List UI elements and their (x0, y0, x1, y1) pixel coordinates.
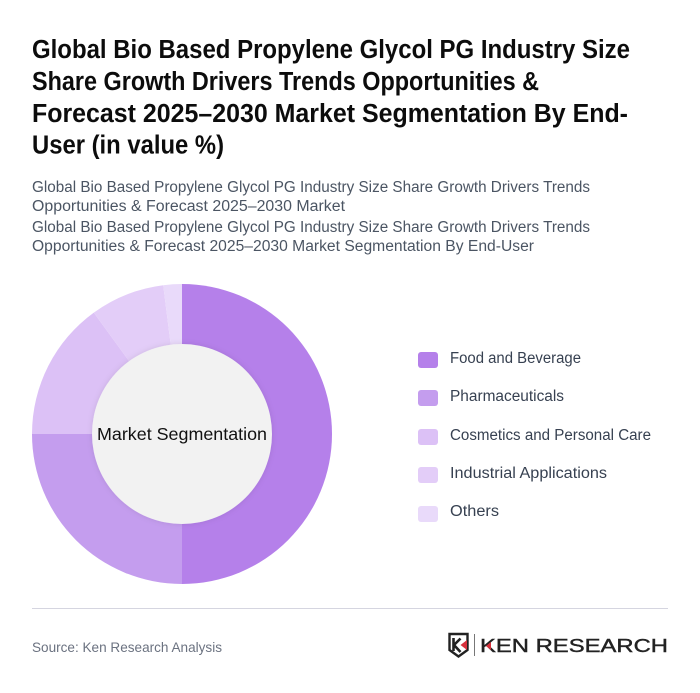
legend item: Industrial Applications: Industrial Applications (450, 465, 607, 482)
subtitle text block: Opportunities & Forecast 2025–2030 Market Segmentation By End-User (32, 238, 534, 255)
title: User (in value %) (32, 132, 224, 160)
legend item: Others (418, 503, 499, 522)
segment: Others 2% (163, 284, 182, 434)
logo wordmark: KEN RESEARCH (480, 635, 668, 656)
source note: Source: Ken Research Analysis (32, 639, 222, 655)
segment: Pharmaceuticals 25% (32, 434, 182, 584)
subtitle text block (32, 179, 590, 255)
subtitle text block: Global Bio Based Propylene Glycol PG Industry Size Share Growth Drivers Trends (32, 179, 590, 196)
segment: Cosmetics and Personal Care 15% (32, 313, 182, 434)
segment: Food and Beverage 50% (182, 284, 332, 584)
icon: red arrow in wordmark (486, 642, 491, 650)
donut centre label: Market Segmentation (97, 424, 267, 444)
subtitle text block: Opportunities & Forecast 2025–2030 Market (32, 198, 346, 215)
title: Share Growth Drivers Trends Opportunities & (32, 68, 539, 96)
title: Global Bio Based Propylene Glycol PG Industry Size (32, 36, 630, 64)
legend (418, 350, 651, 522)
segment: Industrial Applications 8% (94, 285, 182, 434)
donut chart (32, 284, 332, 584)
title (32, 36, 630, 160)
icon: shield (450, 634, 468, 656)
legend item: Others: Others (450, 503, 499, 520)
legend item: Food and Beverage: Food and Beverage (450, 350, 581, 367)
title: Forecast 2025–2030 Market Segmentation By End- (32, 100, 628, 128)
legend item: Pharmaceuticals: Pharmaceuticals (450, 388, 564, 405)
logo: Ken Research (450, 634, 668, 656)
subtitle text block: Global Bio Based Propylene Glycol PG Industry Size Share Growth Drivers Trends (32, 219, 590, 236)
legend item: Cosmetics and Personal Care: Cosmetics and Personal Care (450, 427, 651, 444)
donut centre (92, 344, 272, 524)
